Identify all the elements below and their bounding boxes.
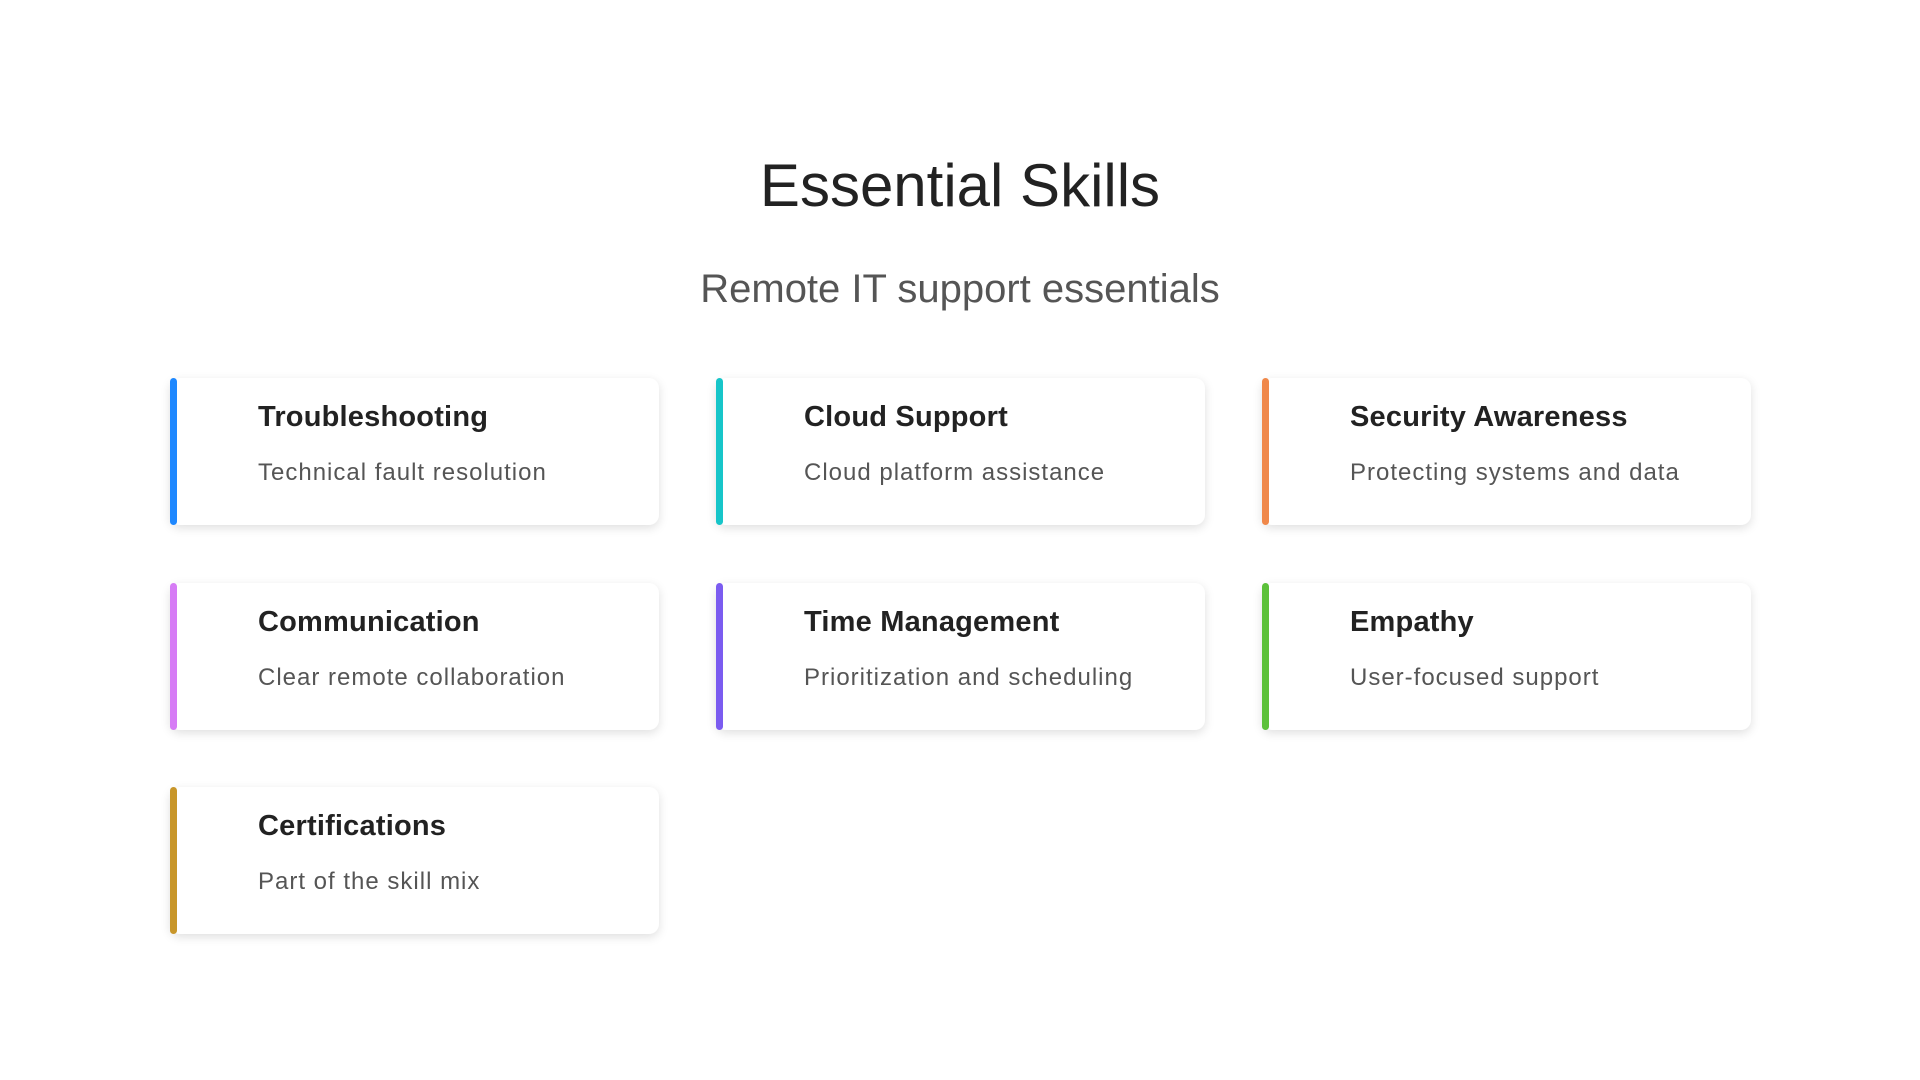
card: certifications	[170, 787, 659, 934]
card: cloud support: Cloud platform assistance	[804, 459, 1105, 486]
card: empathy: User-focused support	[1350, 664, 1599, 691]
card: security awareness: Security Awareness	[1350, 401, 1628, 433]
card: troubleshooting: Troubleshooting	[258, 401, 488, 433]
subtitle: Remote IT support essentials	[700, 267, 1220, 311]
card: communication	[170, 583, 659, 730]
card: empathy: Empathy	[1350, 606, 1474, 638]
card: time management: Time Management	[804, 606, 1059, 638]
card: cloud support: Cloud Support	[804, 401, 1008, 433]
card: certifications: Part of the skill mix	[258, 868, 480, 895]
card: time management	[716, 583, 1205, 730]
card: troubleshooting: Technical fault resolution	[258, 459, 547, 486]
card: time management: Prioritization and scheduling	[804, 664, 1133, 691]
card: cloud support	[716, 378, 1205, 525]
card: security awareness: Protecting systems and data	[1350, 459, 1680, 486]
card: communication: Clear remote collaboration	[258, 664, 565, 691]
card: security awareness	[1262, 378, 1751, 525]
card: certifications: Certifications	[258, 810, 446, 842]
card: troubleshooting	[170, 378, 659, 525]
card: communication: Communication	[258, 606, 480, 638]
card: empathy	[1262, 583, 1751, 730]
title: Essential Skills	[760, 152, 1160, 219]
